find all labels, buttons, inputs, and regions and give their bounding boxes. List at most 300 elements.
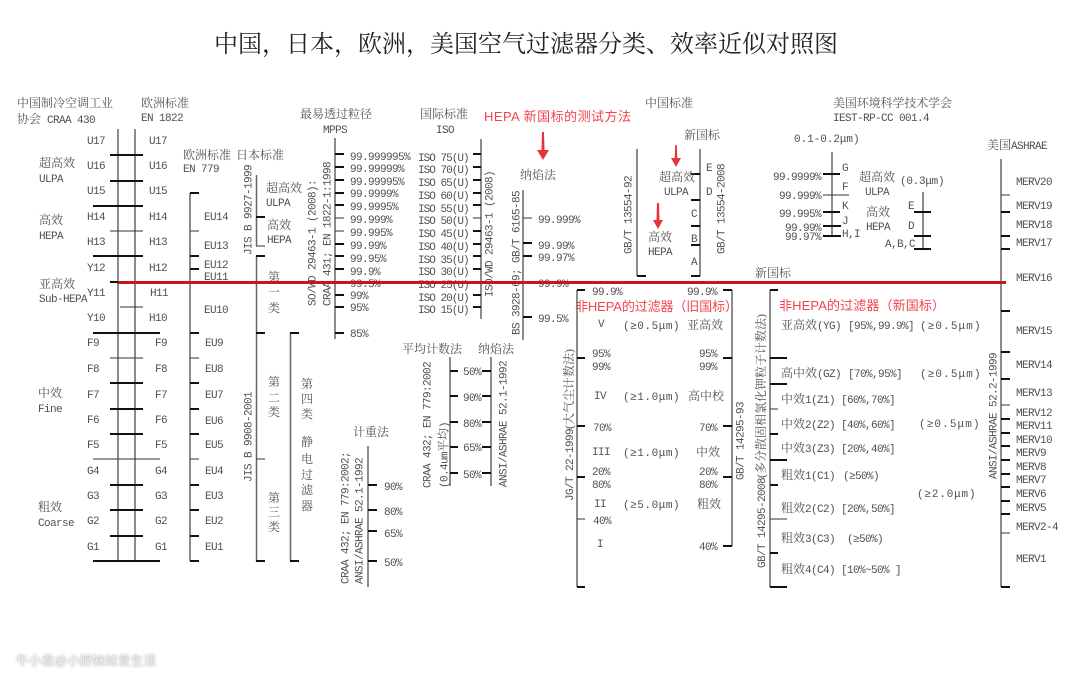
class labels: 类 bbox=[268, 519, 280, 534]
efficiency labels: 90% bbox=[463, 393, 482, 405]
class and range labels: [60%,70%] bbox=[841, 395, 895, 407]
MERV labels: MERV13 bbox=[1016, 388, 1052, 400]
class labels bbox=[648, 163, 713, 269]
efficiency labels: 99.999% bbox=[350, 215, 393, 227]
grade labels bbox=[204, 212, 229, 554]
ISO grade labels: ISO 50(U) bbox=[418, 216, 469, 228]
class labels bbox=[266, 180, 314, 534]
class labels: 滤 bbox=[301, 482, 314, 497]
right grade labels: U17 bbox=[149, 136, 167, 148]
heading: EN 779: EN 779 bbox=[183, 164, 219, 176]
right labels: 粗效 bbox=[697, 496, 721, 511]
MERV labels bbox=[1016, 177, 1059, 566]
class labels: 中效 bbox=[38, 385, 62, 400]
vertical label: CRAA 432: CRAA 432; EN 779:2002; bbox=[340, 452, 352, 584]
efficiency labels: 80% bbox=[384, 507, 403, 519]
class and range labels: [20%,50%] bbox=[841, 504, 895, 516]
class labels: 高效 bbox=[866, 204, 890, 219]
heading: ISO: ISO bbox=[436, 125, 455, 137]
class and range labels: [10%~50% ] bbox=[841, 565, 901, 577]
grade labels: EU10 bbox=[204, 305, 228, 317]
vertical label: GB/T 13554-2008: GB/T 13554-2008 bbox=[716, 164, 728, 254]
efficiency labels: 99.999% bbox=[779, 191, 822, 203]
MERV labels: MERV14 bbox=[1016, 360, 1053, 372]
class labels: 静 bbox=[301, 434, 313, 449]
arrow: to sodium flame method bbox=[537, 132, 549, 160]
class labels: 高效 bbox=[39, 212, 63, 227]
class labels bbox=[859, 169, 944, 251]
left labels: IV bbox=[594, 391, 607, 403]
MERV labels: MERV10 bbox=[1016, 435, 1052, 447]
left labels bbox=[592, 287, 623, 551]
efficiency labels: 99.9999% bbox=[773, 172, 822, 184]
efficiency labels: 99.9% bbox=[538, 279, 569, 291]
class labels: Sub-HEPA bbox=[39, 294, 88, 306]
class labels: D bbox=[908, 221, 915, 233]
class and range labels bbox=[781, 317, 914, 577]
vertical label: particle size: (0.4um平均) bbox=[436, 422, 452, 488]
efficiency labels: 99% bbox=[350, 291, 369, 303]
vertical label: JIS B 9927: JIS B 9927-1999 bbox=[244, 165, 256, 255]
efficiency labels: K bbox=[842, 201, 849, 213]
heading: CRAA 430 bbox=[17, 95, 113, 127]
efficiency labels: 99.995% bbox=[350, 228, 393, 240]
right grade labels: G2 bbox=[155, 516, 167, 528]
class labels: 器 bbox=[301, 499, 313, 513]
heading: ASHRAE: 美国ASHRAE bbox=[987, 138, 1048, 153]
vertical label: GB/T 14295-93: GB/T 14295-93 bbox=[736, 402, 748, 480]
class labels: 超高效 bbox=[859, 169, 895, 184]
left grade labels bbox=[87, 136, 106, 554]
grade labels: EU14 bbox=[204, 212, 229, 224]
grade labels: EU7 bbox=[205, 390, 223, 402]
vertical label: JG/T 22-1999: JG/T 22-1999(大气尘计数法) bbox=[561, 349, 577, 501]
red note: new standard: 非HEPA的过滤器（新国标） bbox=[779, 298, 945, 313]
class and range labels: (≥50%) bbox=[843, 471, 879, 483]
class labels: 三 bbox=[268, 505, 280, 519]
right grade labels: G3 bbox=[155, 491, 167, 503]
MERV labels: MERV2-4 bbox=[1016, 522, 1059, 534]
heading: EN 779: 欧洲标准 bbox=[183, 147, 231, 162]
class labels: 超高效 bbox=[266, 180, 302, 195]
grade labels: EU2 bbox=[205, 516, 223, 528]
class labels: 第 bbox=[268, 491, 280, 505]
scale lines bbox=[93, 129, 160, 561]
heading: sodium flame: 纳焰法 bbox=[520, 167, 557, 182]
grade labels: EU4 bbox=[205, 466, 224, 478]
class labels: 粗效 bbox=[38, 499, 62, 514]
heading: ISO bbox=[420, 106, 468, 137]
ISO grade labels bbox=[418, 153, 469, 317]
efficiency labels bbox=[773, 163, 860, 244]
left grade labels: U17 bbox=[87, 136, 105, 148]
ISO grade labels: ISO 15(U) bbox=[418, 305, 469, 317]
efficiency labels: 99.999995% bbox=[350, 152, 411, 164]
scale lines bbox=[473, 139, 481, 319]
arrow: HEPA bbox=[653, 203, 663, 229]
efficiency labels: 50% bbox=[384, 558, 403, 570]
particle size labels bbox=[917, 321, 980, 501]
vertical label: SO/WD 29463: SO/WD 29463-1 (2008): bbox=[308, 180, 320, 306]
heading: CRAA 430: 中国制冷空调工业 bbox=[17, 95, 113, 110]
right grade labels: F8 bbox=[155, 364, 167, 376]
efficiency labels: 65% bbox=[384, 529, 403, 541]
MERV labels: MERV12 bbox=[1016, 408, 1052, 420]
particle size labels: (≥0.5μm) bbox=[623, 321, 679, 333]
left grade labels: G4 bbox=[87, 466, 100, 478]
MERV labels: MERV5 bbox=[1016, 503, 1046, 515]
class labels: 过 bbox=[301, 467, 313, 482]
panel: IEST standard bbox=[773, 95, 952, 251]
right labels: 70% bbox=[699, 423, 718, 435]
MERV labels: MERV11 bbox=[1016, 421, 1053, 433]
red note: old standard: 非HEPA的过滤器（旧国标） bbox=[575, 299, 738, 314]
efficiency labels: 90% bbox=[384, 482, 403, 494]
heading: mass method: 计重法 bbox=[353, 424, 390, 439]
class labels: 第 bbox=[301, 377, 313, 391]
right grade labels: F6 bbox=[155, 415, 167, 427]
class labels: E bbox=[908, 201, 915, 213]
right labels: 20% bbox=[699, 467, 718, 479]
vertical label: CRAA 432: CRAA 432; EN 779:2002 bbox=[422, 362, 434, 488]
class labels: 超高效 bbox=[39, 155, 75, 170]
class labels: 电 bbox=[301, 451, 313, 466]
scale lines bbox=[637, 149, 700, 276]
right labels: 40% bbox=[699, 542, 718, 554]
efficiency labels: 50% bbox=[463, 367, 482, 379]
class labels: 类 bbox=[268, 404, 280, 419]
particle size labels: (≥0.5μm) bbox=[920, 321, 980, 333]
panel: ASHRAE MERV scale bbox=[987, 138, 1059, 587]
MERV labels: MERV8 bbox=[1016, 462, 1046, 474]
right grade labels: H13 bbox=[149, 237, 167, 249]
left grade labels: G2 bbox=[87, 516, 99, 528]
efficiency labels: 99.995% bbox=[779, 209, 822, 221]
ISO grade labels: ISO 60(U) bbox=[418, 191, 469, 203]
right labels: 中效 bbox=[696, 444, 720, 459]
class labels: 超高效 bbox=[659, 169, 695, 184]
ISO grade labels: ISO 75(U) bbox=[418, 153, 469, 165]
efficiency labels: 99.9999% bbox=[350, 189, 399, 201]
efficiency labels: 99.5% bbox=[350, 279, 381, 291]
heading: IEST bbox=[833, 95, 952, 125]
heading: EN 779 bbox=[183, 147, 231, 176]
ISO grade labels: ISO 35(U) bbox=[418, 255, 469, 267]
left labels: 20% bbox=[592, 467, 611, 479]
class and range labels: 粗效2(C2) bbox=[781, 501, 835, 516]
scale lines bbox=[256, 175, 299, 561]
class and range labels: [40%,60%] bbox=[841, 420, 895, 432]
particle size labels: (≥0.5μm) bbox=[919, 419, 979, 431]
MERV labels: MERV6 bbox=[1016, 489, 1046, 501]
right labels: 95% bbox=[699, 349, 718, 361]
class labels: 类 bbox=[268, 300, 280, 315]
right grade labels: F5 bbox=[155, 440, 167, 452]
left grade labels: Y10 bbox=[87, 313, 105, 325]
class and range labels: 中效2(Z2) bbox=[781, 417, 835, 432]
heading: CRAA 430: 协会 CRAA 430 bbox=[17, 111, 95, 127]
title: 中国，日本，欧洲，美国空气过滤器分类、效率近似对照图 bbox=[214, 24, 838, 59]
heading: MPPS bbox=[300, 106, 372, 137]
efficiency labels: 99.99% bbox=[538, 241, 575, 253]
scale lines bbox=[335, 138, 344, 339]
MERV labels: MERV17 bbox=[1016, 238, 1052, 250]
left labels: 99% bbox=[592, 362, 611, 374]
efficiency labels: G bbox=[842, 163, 848, 175]
efficiency labels: F bbox=[842, 182, 848, 194]
class and range labels: 亚高效(YG) bbox=[781, 318, 841, 333]
left grade labels: F8 bbox=[87, 364, 99, 376]
left grade labels: Y12 bbox=[87, 263, 105, 275]
scale lines bbox=[823, 152, 931, 249]
class labels: ULPA bbox=[865, 187, 890, 199]
efficiency labels: 99.97% bbox=[538, 253, 575, 265]
grade labels: EU8 bbox=[205, 364, 223, 376]
class labels: ULPA bbox=[664, 187, 689, 199]
class labels: Coarse bbox=[38, 518, 74, 530]
class labels: 一 bbox=[268, 285, 280, 299]
panel: EN 779 scale bbox=[183, 147, 231, 561]
class labels: B bbox=[691, 234, 698, 246]
vertical label: JIS B 9908: JIS B 9908-2001 bbox=[244, 391, 256, 482]
class labels: E bbox=[706, 163, 713, 175]
right grade labels: G4 bbox=[155, 466, 168, 478]
efficiency labels: 99.5% bbox=[538, 314, 569, 326]
heading: ISO: 国际标准 bbox=[420, 106, 468, 121]
class labels: HEPA bbox=[866, 222, 891, 234]
ISO grade labels: ISO 40(U) bbox=[418, 242, 469, 254]
right labels: 亚高效 bbox=[687, 317, 723, 332]
class labels: Fine bbox=[38, 404, 62, 416]
right labels: 80% bbox=[699, 480, 718, 492]
MERV labels: MERV20 bbox=[1016, 177, 1052, 189]
efficiency labels: 99.95% bbox=[350, 254, 387, 266]
panel: sodium flame scale bbox=[512, 167, 581, 340]
left labels: 99.9% bbox=[592, 287, 623, 299]
class labels: 第 bbox=[268, 270, 280, 284]
left grade labels: F7 bbox=[87, 390, 99, 402]
scale lines bbox=[368, 446, 377, 587]
efficiency labels bbox=[384, 482, 403, 570]
ISO grade labels: ISO 25(U) bbox=[418, 280, 469, 292]
grade labels: EU5 bbox=[205, 440, 223, 452]
MERV labels: MERV9 bbox=[1016, 448, 1046, 460]
grade labels: EU9 bbox=[205, 338, 223, 350]
heading: new standard label: 新国标 bbox=[755, 265, 792, 280]
vertical label: CRAA 431: CRAA 431; EN 1822-1:1998 bbox=[322, 162, 334, 306]
vertical label: ANSI 52.1: ANSI/ASHRAE 52.1-1992 bbox=[498, 361, 510, 487]
scale lines bbox=[577, 290, 732, 587]
efficiency labels: 95% bbox=[350, 303, 369, 315]
left grade labels: H13 bbox=[87, 237, 105, 249]
class labels: 高效 bbox=[267, 217, 291, 232]
heading: EN 1822 bbox=[141, 95, 189, 125]
efficiency labels: 99.9995% bbox=[350, 202, 399, 214]
efficiency labels: 99.99% bbox=[350, 241, 387, 253]
efficiency labels bbox=[463, 367, 482, 482]
label: 0.1-0.2 micron: 0.1-0.2μm) bbox=[794, 134, 859, 146]
class labels bbox=[38, 155, 88, 530]
right grade labels: U15 bbox=[149, 186, 167, 198]
class and range labels: 粗效4(C4) bbox=[781, 562, 835, 577]
ISO grade labels: ISO 20(U) bbox=[418, 293, 469, 305]
ISO grade labels: ISO 30(U) bbox=[418, 267, 469, 279]
MERV labels: MERV1 bbox=[1016, 554, 1047, 566]
class labels: ULPA bbox=[266, 198, 291, 210]
class and range labels: 粗效3(C3) bbox=[781, 531, 835, 546]
right labels: 高中校 bbox=[688, 388, 725, 403]
left grade labels: U15 bbox=[87, 186, 105, 198]
class labels: 高效 bbox=[648, 229, 672, 244]
heading: IEST: IEST-RP-CC 001.4 bbox=[833, 113, 930, 125]
class labels: HEPA bbox=[39, 231, 64, 243]
headings: 纳焰法 bbox=[478, 341, 515, 356]
grade labels: EU11 bbox=[204, 272, 229, 284]
left grade labels: F6 bbox=[87, 415, 99, 427]
particle size labels: (≥1.0μm) bbox=[623, 448, 679, 460]
left grade labels: U16 bbox=[87, 161, 105, 173]
left grade labels: F5 bbox=[87, 440, 99, 452]
particle size labels: (≥0.5μm) bbox=[920, 369, 980, 381]
class and range labels: [70%,95%] bbox=[848, 369, 902, 381]
left labels: 40% bbox=[593, 516, 612, 528]
vertical label: ISO/WD 29463: ISO/WD 29463-1 (2008) bbox=[484, 171, 496, 297]
watermark: 牛小君@小野妹妹爱生活 bbox=[16, 653, 156, 668]
left labels: V bbox=[598, 319, 605, 331]
efficiency labels bbox=[350, 152, 411, 341]
class and range labels: 高中效(GZ) bbox=[781, 366, 841, 381]
red divider line bbox=[118, 281, 1006, 284]
MERV labels: MERV7 bbox=[1016, 475, 1046, 487]
right labels: 99% bbox=[699, 362, 718, 374]
left grade labels: Y11 bbox=[87, 288, 106, 300]
ISO grade labels: ISO 70(U) bbox=[418, 165, 469, 177]
grade labels: EU6 bbox=[205, 416, 223, 428]
panel: new non-HEPA standard bbox=[753, 290, 980, 587]
panel: ISO scale bbox=[418, 106, 496, 319]
grade labels: EU1 bbox=[205, 542, 224, 554]
class labels: 四 bbox=[301, 392, 313, 406]
right grade labels: H11 bbox=[150, 288, 169, 300]
class and range labels: 中效3(Z3) bbox=[781, 441, 835, 456]
efficiency labels: 65% bbox=[463, 443, 482, 455]
efficiency labels: 99.9% bbox=[350, 267, 381, 279]
class and range labels: [95%,99.9%] bbox=[848, 321, 914, 333]
right grade labels: U16 bbox=[149, 161, 167, 173]
ISO grade labels: ISO 65(U) bbox=[418, 178, 469, 190]
left labels: II bbox=[594, 499, 606, 511]
class and range labels: [20%,40%] bbox=[841, 444, 895, 456]
left grade labels: G1 bbox=[87, 542, 100, 554]
particle size labels: (≥1.0μm) bbox=[623, 392, 679, 404]
ISO grade labels: ISO 45(U) bbox=[418, 229, 469, 241]
heading: Japan: 日本标准 bbox=[236, 147, 284, 162]
red note: HEPA test method: HEPA 新国标的测试方法 bbox=[484, 109, 631, 124]
heading: Chinese standard: 中国标准 bbox=[645, 95, 693, 110]
panel: MPPS scale bbox=[300, 106, 411, 341]
efficiency labels: 99.999% bbox=[538, 215, 581, 227]
left labels: 80% bbox=[592, 480, 611, 492]
MERV labels: MERV18 bbox=[1016, 220, 1052, 232]
heading: EN 1822: 欧洲标准 bbox=[141, 95, 189, 110]
ISO grade labels: ISO 55(U) bbox=[418, 204, 469, 216]
particle size labels: (≥5.0μm) bbox=[623, 500, 679, 512]
headings bbox=[402, 341, 515, 356]
grade labels: EU12 bbox=[204, 260, 228, 272]
vertical label: BS 3928: BS 3928-69; GB/T 6165-85 bbox=[512, 191, 524, 335]
class and range labels: (≥50%) bbox=[847, 534, 883, 546]
efficiency labels bbox=[538, 215, 581, 326]
class labels: A,B,C bbox=[885, 239, 916, 251]
scale lines bbox=[1001, 159, 1010, 587]
scale lines bbox=[190, 193, 199, 561]
right grade labels: F9 bbox=[155, 338, 167, 350]
efficiency labels: 99.99% bbox=[785, 223, 822, 235]
vertical label: GB/T 14295-2008: GB/T 14295-2008(多分散固相氯化钾粒子计数法) bbox=[753, 314, 769, 568]
class labels: HEPA bbox=[267, 235, 292, 247]
efficiency labels: 50% bbox=[463, 470, 482, 482]
heading: IEST: 美国环境科学技术学会 bbox=[833, 95, 952, 110]
class and range labels: 中效1(Z1) bbox=[781, 392, 835, 407]
efficiency labels: H,I bbox=[842, 229, 860, 241]
class labels: A bbox=[691, 257, 698, 269]
right grade labels: F7 bbox=[155, 390, 167, 402]
panel: mass method scale bbox=[340, 424, 403, 587]
class labels: HEPA bbox=[648, 247, 673, 259]
class and range labels: 粗效1(C1) bbox=[781, 468, 835, 483]
efficiency labels: J bbox=[842, 216, 848, 228]
heading: EN 1822: EN 1822 bbox=[141, 113, 183, 125]
left grade labels: F9 bbox=[87, 338, 99, 350]
class labels: 第 bbox=[268, 375, 280, 389]
right labels: 99.9% bbox=[687, 287, 718, 299]
right labels bbox=[687, 287, 725, 554]
scale lines bbox=[770, 290, 787, 587]
left labels: 95% bbox=[592, 349, 611, 361]
class labels: (0.3μm) bbox=[900, 176, 944, 188]
scale lines bbox=[450, 357, 491, 486]
class labels: C bbox=[691, 209, 698, 221]
right grade labels: H14 bbox=[149, 212, 168, 224]
efficiency labels: 99.99995% bbox=[350, 177, 405, 189]
panel: Japanese standard scale bbox=[236, 147, 314, 561]
right grade labels: H12 bbox=[149, 263, 167, 275]
arrow: ULPA bbox=[671, 145, 681, 167]
left grade labels: G3 bbox=[87, 491, 99, 503]
left labels: 70% bbox=[593, 423, 612, 435]
heading: MPPS: 最易透过粒径 bbox=[300, 106, 372, 121]
heading: MPPS: MPPS bbox=[323, 125, 348, 137]
efficiency labels: 85% bbox=[350, 329, 369, 341]
right grade labels bbox=[149, 136, 169, 554]
efficiency labels: 99.97% bbox=[785, 232, 822, 244]
headings: 平均计数法 bbox=[402, 341, 463, 356]
left grade labels: H14 bbox=[87, 212, 106, 224]
grade labels: EU3 bbox=[205, 491, 223, 503]
right grade labels: H10 bbox=[149, 313, 167, 325]
heading: new standard: 新国标 bbox=[684, 127, 721, 142]
panel: old non-HEPA standard bbox=[561, 287, 748, 587]
MERV labels: MERV16 bbox=[1016, 273, 1052, 285]
right grade labels: G1 bbox=[155, 542, 168, 554]
watermark: 牛小君@小野妹妹爱生活 bbox=[16, 653, 156, 668]
panel: Chinese standard HEPA bbox=[624, 95, 728, 276]
efficiency labels: 80% bbox=[463, 419, 482, 431]
panel: CRAA 430 and EN 1822 scale bbox=[17, 95, 189, 561]
class labels: 亚高效 bbox=[39, 276, 75, 291]
class labels: 类 bbox=[301, 406, 313, 421]
grade labels: EU13 bbox=[204, 241, 228, 253]
